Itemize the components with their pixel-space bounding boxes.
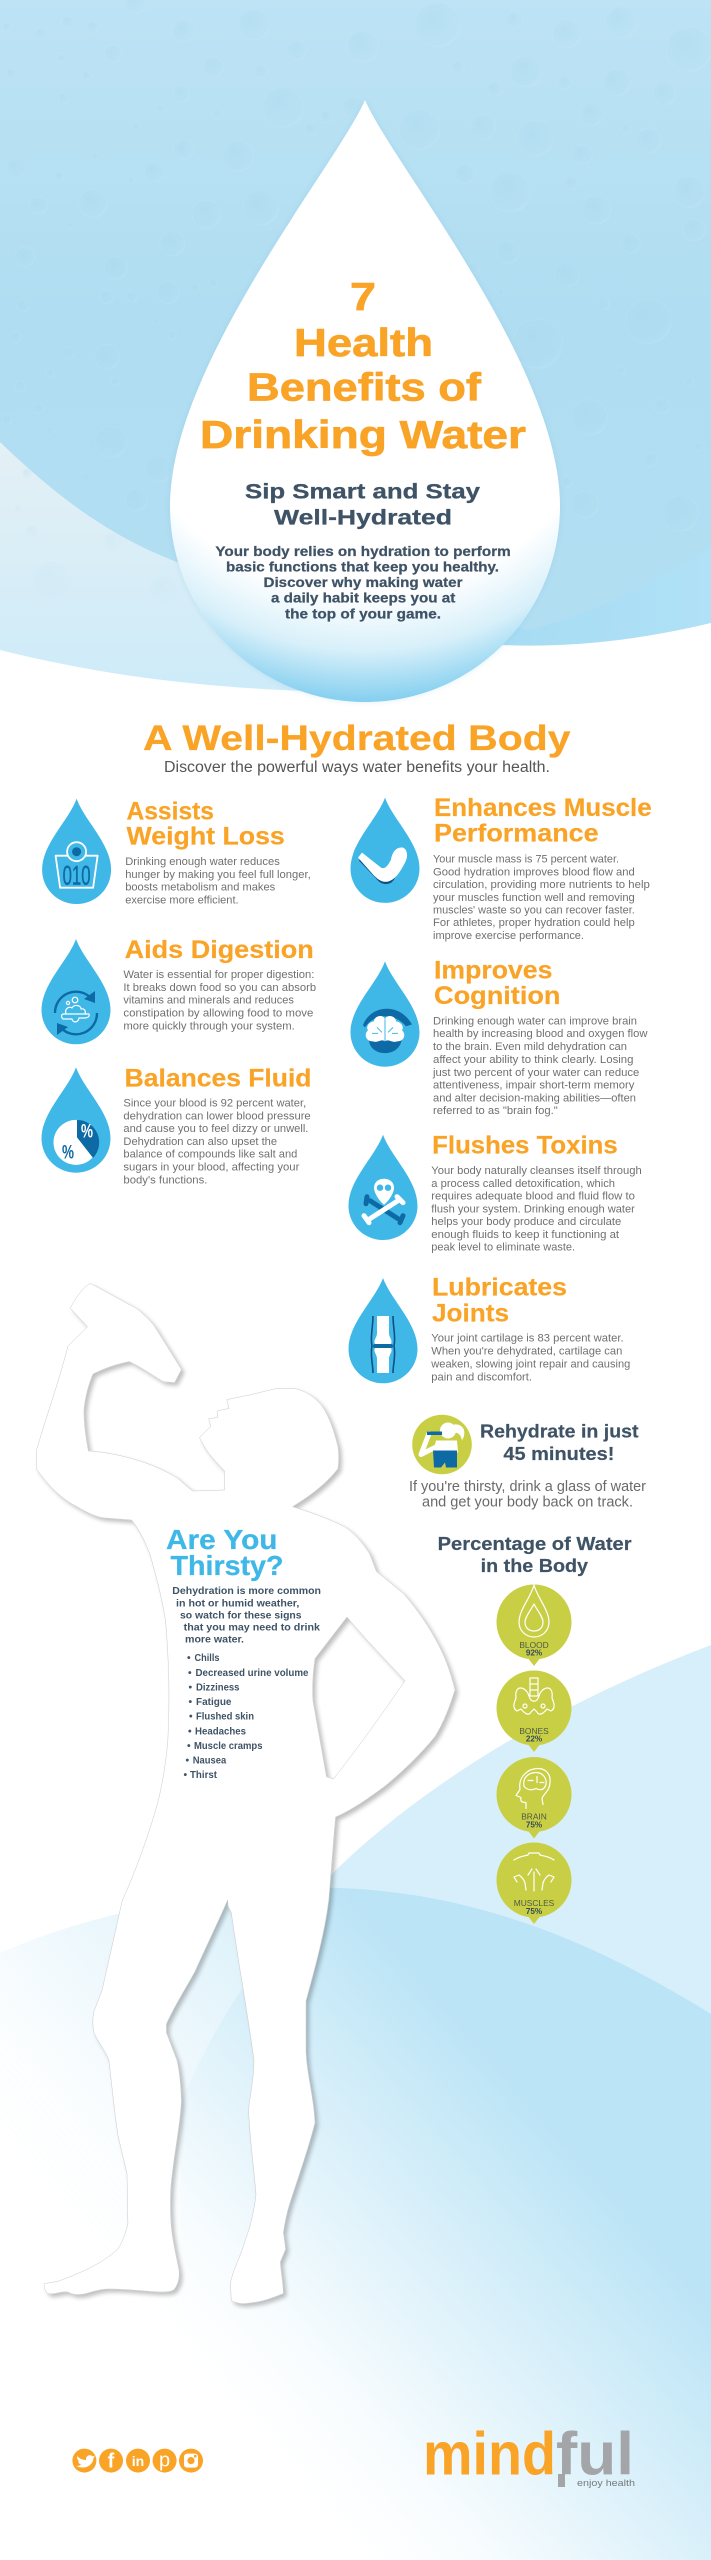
badge: blood: 92%: [526, 1648, 543, 1658]
symptoms list: Decreased urine volume: [196, 1668, 309, 1679]
logo: mindful: mind: [423, 2420, 556, 2488]
are you thirsty panel: Thirsty?: [170, 1550, 284, 1581]
social icons: in: [132, 2453, 144, 2469]
benefit: enhances muscle performance: Enhances Muscle: [434, 794, 652, 822]
benefit: aids digestion: vitamins and minerals and reduces: [123, 994, 294, 1006]
benefit: assists weight loss: boosts metabolism and makes: [125, 882, 276, 894]
benefit: enhances muscle performance: Good hydration improves blood flow and: [433, 866, 635, 878]
section heading: Discover the powerful ways water benefits your health.: [164, 759, 550, 776]
intro text: [215, 544, 511, 621]
benefit: flushes toxins: Flushes Toxins: [432, 1132, 618, 1160]
benefit: improves cognition: referred to as "brain fog.": [433, 1105, 558, 1117]
intro text: Discover why making water: [264, 575, 463, 590]
title: Health: [294, 322, 433, 365]
bottom fade to white: [0, 1640, 711, 2560]
badge: bones: BONES: [519, 1726, 549, 1736]
benefit: aids digestion: [42, 936, 316, 1044]
benefit: balances fluid: dehydration can lower blood pressure: [123, 1110, 311, 1122]
badge: blood: [496, 1584, 572, 1666]
benefit: improves cognition: Cognition: [434, 982, 560, 1010]
hero water background: [0, 0, 711, 630]
intro text: the top of your game.: [285, 606, 441, 621]
badge: muscles: MUSCLES: [514, 1898, 555, 1908]
badge: brain: 75%: [526, 1820, 543, 1830]
benefit: enhances muscle performance: Performance: [434, 820, 599, 848]
symptoms list: •: [188, 1668, 192, 1679]
badge: muscles: 75%: [526, 1907, 543, 1916]
symptoms list: Dizziness: [196, 1683, 240, 1694]
symptoms list: •: [188, 1683, 192, 1694]
intro text: Your body relies on hydration to perform: [215, 544, 511, 559]
water droplet texture: [1, 0, 711, 603]
bottom right wave: [181, 1645, 711, 2560]
title: [200, 276, 526, 457]
section heading: [143, 719, 571, 776]
symptoms list: Thirst: [190, 1770, 218, 1781]
badge: bones: 22%: [526, 1734, 543, 1744]
bottom arc wave: [0, 1888, 711, 2560]
benefit: assists weight loss: Weight Loss: [126, 823, 285, 851]
benefit: lubricates joints: weaken, slowing joint repair and causing: [430, 1358, 630, 1370]
benefit: enhances muscle performance: improve exercise performance.: [433, 930, 584, 942]
benefit: assists weight loss: Drinking enough water reduces: [125, 856, 280, 868]
hero large water drop: [170, 100, 560, 702]
benefit: flushes toxins: helps your body produce and circulate: [431, 1216, 621, 1228]
rehydrate callout: Rehydrate in just: [480, 1420, 638, 1442]
symptoms list: Flushed skin: [196, 1712, 254, 1723]
benefit: assists weight loss: exercise more efficient.: [125, 895, 239, 907]
symptoms list: Fatigue: [196, 1697, 232, 1708]
benefit: improves cognition: Drinking enough water can improve brain: [433, 1016, 637, 1028]
icon: skull and crossbones in drop: [348, 1135, 418, 1240]
benefit: improves cognition: attentiveness, impair short-term memory: [433, 1079, 635, 1091]
symptoms list: •: [184, 1770, 188, 1781]
benefit: lubricates joints: Lubricates: [432, 1274, 567, 1302]
logo: mindful: ful: [556, 2420, 634, 2488]
social icons: p: [159, 2450, 170, 2472]
benefit: aids digestion: more quickly through your system.: [123, 1020, 295, 1032]
symptoms list: •: [189, 1712, 193, 1723]
icon: percent pie in drop: %: [81, 1121, 93, 1142]
symptoms list: Headaches: [195, 1726, 246, 1737]
subtitle: [245, 480, 480, 530]
benefit: improves cognition: Improves: [434, 957, 552, 985]
icon: flexed arm in drop: [350, 798, 420, 903]
are you thirsty panel: in hot or humid weather,: [176, 1598, 299, 1609]
symptoms list: Muscle cramps: [194, 1741, 263, 1752]
symptoms list: •: [186, 1755, 190, 1766]
rehydrate callout: [409, 1415, 646, 1511]
benefit: flushes toxins: [348, 1132, 642, 1254]
are you thirsty panel: Dehydration is more common: [172, 1586, 321, 1597]
logo: mindful: [423, 2420, 635, 2489]
benefit: assists weight loss: Assists: [126, 797, 214, 825]
are you thirsty panel: so watch for these signs: [180, 1610, 302, 1621]
logo: mindful: enjoy health: [577, 2478, 635, 2489]
are you thirsty panel: [166, 1524, 321, 1781]
benefit: balances fluid: and cause you to feel dizzy or unwell.: [123, 1123, 308, 1135]
icon: scale in drop: 010: [63, 861, 91, 891]
benefit: balances fluid: sugars in your blood, affecting your: [123, 1162, 300, 1174]
title: 7: [350, 276, 376, 319]
icon: brain in drop: [350, 961, 420, 1067]
intro text: basic functions that keep you healthy.: [226, 559, 499, 574]
benefit: assists weight loss: hunger by making you feel full longer,: [125, 869, 311, 881]
benefit: enhances muscle performance: [350, 794, 652, 942]
rehydrate callout: If you're thirsty, drink a glass of water: [409, 1479, 646, 1495]
benefit: balances fluid: Since your blood is 92 percent water,: [123, 1097, 306, 1109]
icon: person drinking: [412, 1415, 472, 1474]
benefit: lubricates joints: When you're dehydrated, cartilage can: [431, 1346, 622, 1358]
benefit: lubricates joints: pain and discomfort.: [431, 1371, 532, 1383]
badge: blood: BLOOD: [519, 1640, 549, 1650]
benefit: lubricates joints: Your joint cartilage is 83 percent water.: [431, 1332, 624, 1344]
benefit: balances fluid: body's functions.: [123, 1174, 207, 1186]
icon: scale in drop: [42, 799, 111, 904]
subtitle: Well-Hydrated: [274, 506, 452, 530]
social icons: [72, 2449, 203, 2473]
symptoms list: •: [187, 1653, 191, 1664]
benefit: lubricates joints: Joints: [432, 1299, 509, 1327]
icon: digestion cycle in drop: [42, 939, 110, 1044]
benefit: flushes toxins: requires adequate blood and fluid flow to: [431, 1190, 635, 1202]
benefit: aids digestion: Aids Digestion: [125, 936, 314, 964]
heading: percentage of water: Percentage of Water: [438, 1533, 632, 1554]
symptoms list: Nausea: [193, 1755, 226, 1766]
benefit: enhances muscle performance: circulation, providing more nutrients to help: [433, 879, 650, 891]
icon: percent pie in drop: %: [62, 1142, 74, 1163]
are you thirsty panel: Are You: [166, 1524, 278, 1555]
benefit: enhances muscle performance: For athletes, proper hydration could help: [433, 917, 635, 929]
section heading: A Well-Hydrated Body: [143, 719, 571, 758]
social icons: f: [108, 2450, 115, 2472]
benefit: balances fluid: [42, 1064, 312, 1186]
icon: knee joint in drop: [348, 1278, 418, 1383]
are you thirsty panel: that you may need to drink: [184, 1622, 320, 1633]
benefit: improves cognition: just two percent of your water can reduce: [432, 1067, 639, 1079]
badge: brain: BRAIN: [521, 1812, 547, 1822]
symptoms list: Chills: [194, 1653, 220, 1664]
benefit: improves cognition: health by increasing blood and oxygen flow: [433, 1028, 648, 1040]
icon: percent pie in drop: [42, 1067, 110, 1173]
heading: percentage of water: in the Body: [481, 1555, 589, 1576]
benefit: enhances muscle performance: muscles' waste so you can recover faster.: [433, 904, 635, 916]
benefit: improves cognition: to the brain. Even mild dehydration can: [433, 1041, 627, 1053]
benefit: improves cognition: [350, 957, 648, 1117]
rehydrate callout: and get your body back on track.: [422, 1495, 633, 1511]
are you thirsty panel: more water.: [185, 1634, 244, 1645]
benefit: flushes toxins: a process called detoxification, which: [431, 1178, 615, 1190]
symptoms list: •: [188, 1726, 192, 1737]
heading: percentage of water: [438, 1533, 632, 1576]
benefit: balances fluid: Balances Fluid: [125, 1064, 312, 1092]
benefit: balances fluid: balance of compounds like salt and: [123, 1149, 297, 1161]
body silhouette: [36, 1284, 455, 2304]
benefit: enhances muscle performance: Your muscle mass is 75 percent water.: [433, 853, 619, 865]
benefit: assists weight loss: [42, 797, 311, 907]
benefit: flushes toxins: Your body naturally cleanses itself through: [431, 1165, 642, 1177]
benefit: enhances muscle performance: your muscles function well and removing: [433, 892, 635, 904]
rehydrate callout: 45 minutes!: [503, 1443, 614, 1464]
badge: bones: [496, 1670, 572, 1752]
title: Drinking Water: [200, 414, 526, 457]
badge: brain: [496, 1757, 572, 1838]
title: Benefits of: [247, 366, 482, 410]
benefit: flushes toxins: enough fluids to keep it functioning at: [431, 1229, 620, 1241]
symptoms list: •: [188, 1697, 192, 1708]
badge: muscles: [496, 1842, 572, 1924]
benefit: aids digestion: constipation by allowing food to move: [123, 1008, 313, 1020]
benefit: balances fluid: Dehydration can also upset the: [123, 1136, 277, 1148]
intro text: a daily habit keeps you at: [271, 591, 456, 606]
benefit: improves cognition: and alter decision-making abilities—often: [433, 1092, 636, 1104]
benefit: flushes toxins: peak level to eliminate waste.: [431, 1242, 575, 1254]
subtitle: Sip Smart and Stay: [245, 480, 480, 504]
hero left light wave: [0, 440, 330, 692]
benefit: improves cognition: affect your ability to think clearly. Losing: [433, 1054, 634, 1066]
symptoms list: [184, 1653, 309, 1781]
benefit: aids digestion: It breaks down food so you can absorb: [123, 982, 316, 994]
benefit: flushes toxins: flush your system. Drinking enough water: [431, 1203, 635, 1215]
hero right blue wave: [500, 545, 711, 646]
benefit: aids digestion: Water is essential for proper digestion:: [123, 969, 314, 981]
benefit: lubricates joints: [348, 1274, 630, 1383]
symptoms list: •: [187, 1741, 191, 1752]
